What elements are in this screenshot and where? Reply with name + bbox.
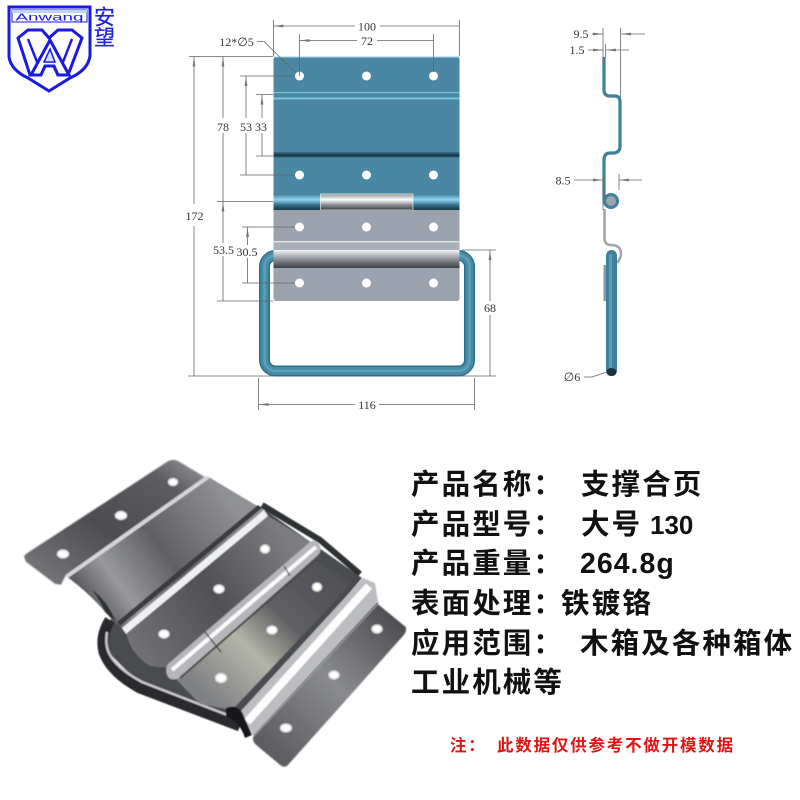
spec: surface finish: 铁镀铬 (561, 588, 653, 620)
spec: applications (411, 628, 794, 660)
technical drawing: side view (556, 27, 645, 384)
right ridge (240, 578, 378, 737)
dimension: 9.5 (574, 27, 645, 41)
dimension: 72: 72 (361, 34, 373, 48)
dimension: 53.5: 53.5 (213, 243, 234, 257)
product specification text (411, 469, 794, 699)
dimension: dia 6: ∅6 (564, 370, 580, 384)
technical drawing: front view (186, 20, 496, 412)
left flange (24, 460, 205, 585)
logo: brand characters: 安 (94, 2, 115, 32)
dimension: 100: 100 (358, 20, 376, 34)
AW monogram (18, 30, 82, 75)
side profile: lower leaf (604, 209, 621, 263)
spec: weight: 产品重量： (411, 548, 564, 580)
product photo: chrome hinge (24, 460, 406, 767)
dimension: 30.5: 30.5 (236, 245, 258, 259)
spec: product name (411, 469, 703, 501)
dimension: 53: 53 (240, 120, 252, 134)
handle loop (264, 256, 470, 371)
disclaimer note: 此数据仅供参考不做开模数据 (497, 735, 735, 755)
dimension: 8.5: 8.5 (556, 174, 570, 188)
dimension: 1.5 (570, 43, 629, 57)
side profile: hinge barrel (604, 194, 618, 208)
spec: product name: 支撑合页 (581, 469, 703, 501)
dimension: 53.5 (213, 202, 234, 301)
spec: model: 大号 (581, 509, 642, 541)
dimension: 68 (484, 250, 496, 376)
spec: weight: 264.8g (580, 548, 675, 580)
upper raised panel (66, 476, 264, 628)
upper panel reflections (66, 476, 268, 634)
dimension: 1.5: 1.5 (570, 43, 584, 57)
spec: applications: 应用范围： (411, 628, 564, 660)
dimension: 12 holes dia 5: 12*∅5 (219, 35, 254, 49)
dimension: 33: 33 (255, 120, 267, 134)
dimension: 33 (255, 94, 267, 156)
dimension: 116: 116 (358, 398, 376, 412)
spec: weight (411, 548, 675, 580)
spec: product name: 产品名称： (411, 469, 564, 501)
side extension lines (603, 28, 620, 210)
dimension: 53 (240, 76, 252, 175)
plate backing (106, 510, 362, 722)
handle front curve (103, 620, 240, 726)
extension lines (188, 20, 496, 410)
dimension: 30.5 (236, 227, 258, 283)
hinge barrel (320, 194, 413, 210)
mounting holes (295, 72, 438, 288)
dimension: 78: 78 (217, 120, 229, 134)
right flange (253, 604, 406, 767)
dimension: 12 holes dia 5 (219, 35, 296, 73)
spec: model: 产品型号： (411, 509, 564, 541)
side profile: handle (606, 250, 617, 376)
logo: brand characters (94, 2, 115, 52)
dimension: dia 6 (564, 370, 607, 384)
shield outline (9, 7, 90, 91)
chrome holes (58, 478, 382, 732)
side profile: grey plate edge (604, 265, 606, 301)
side profile: upper leaf (604, 57, 620, 200)
teal upper plate (274, 56, 460, 210)
spec: applications: 木箱及各种箱体 (580, 628, 794, 660)
dimension: 9.5: 9.5 (574, 27, 588, 41)
middle panel (126, 516, 316, 668)
spec: surface finish: 表面处理： (411, 588, 564, 620)
hinge pin (166, 541, 321, 679)
spec: model: 130 (650, 510, 693, 540)
grey lower plate (274, 210, 460, 301)
handle end (226, 707, 252, 738)
spec: model (411, 509, 693, 541)
lower panel (175, 558, 352, 710)
logo banner: Anwang (16, 12, 84, 24)
dimension: 172: 172 (186, 209, 204, 223)
spec: surface finish (411, 588, 653, 620)
dimension: 68: 68 (484, 301, 496, 315)
dimension: 72 (300, 34, 434, 48)
disclaimer note: 注： (450, 735, 487, 755)
handle rear (262, 505, 360, 574)
dimension: 8.5 (556, 174, 642, 188)
logo: Anwang shield (9, 7, 90, 91)
spec: applications continued: 工业机械等 (411, 667, 564, 699)
logo: brand characters: 望 (94, 22, 115, 52)
